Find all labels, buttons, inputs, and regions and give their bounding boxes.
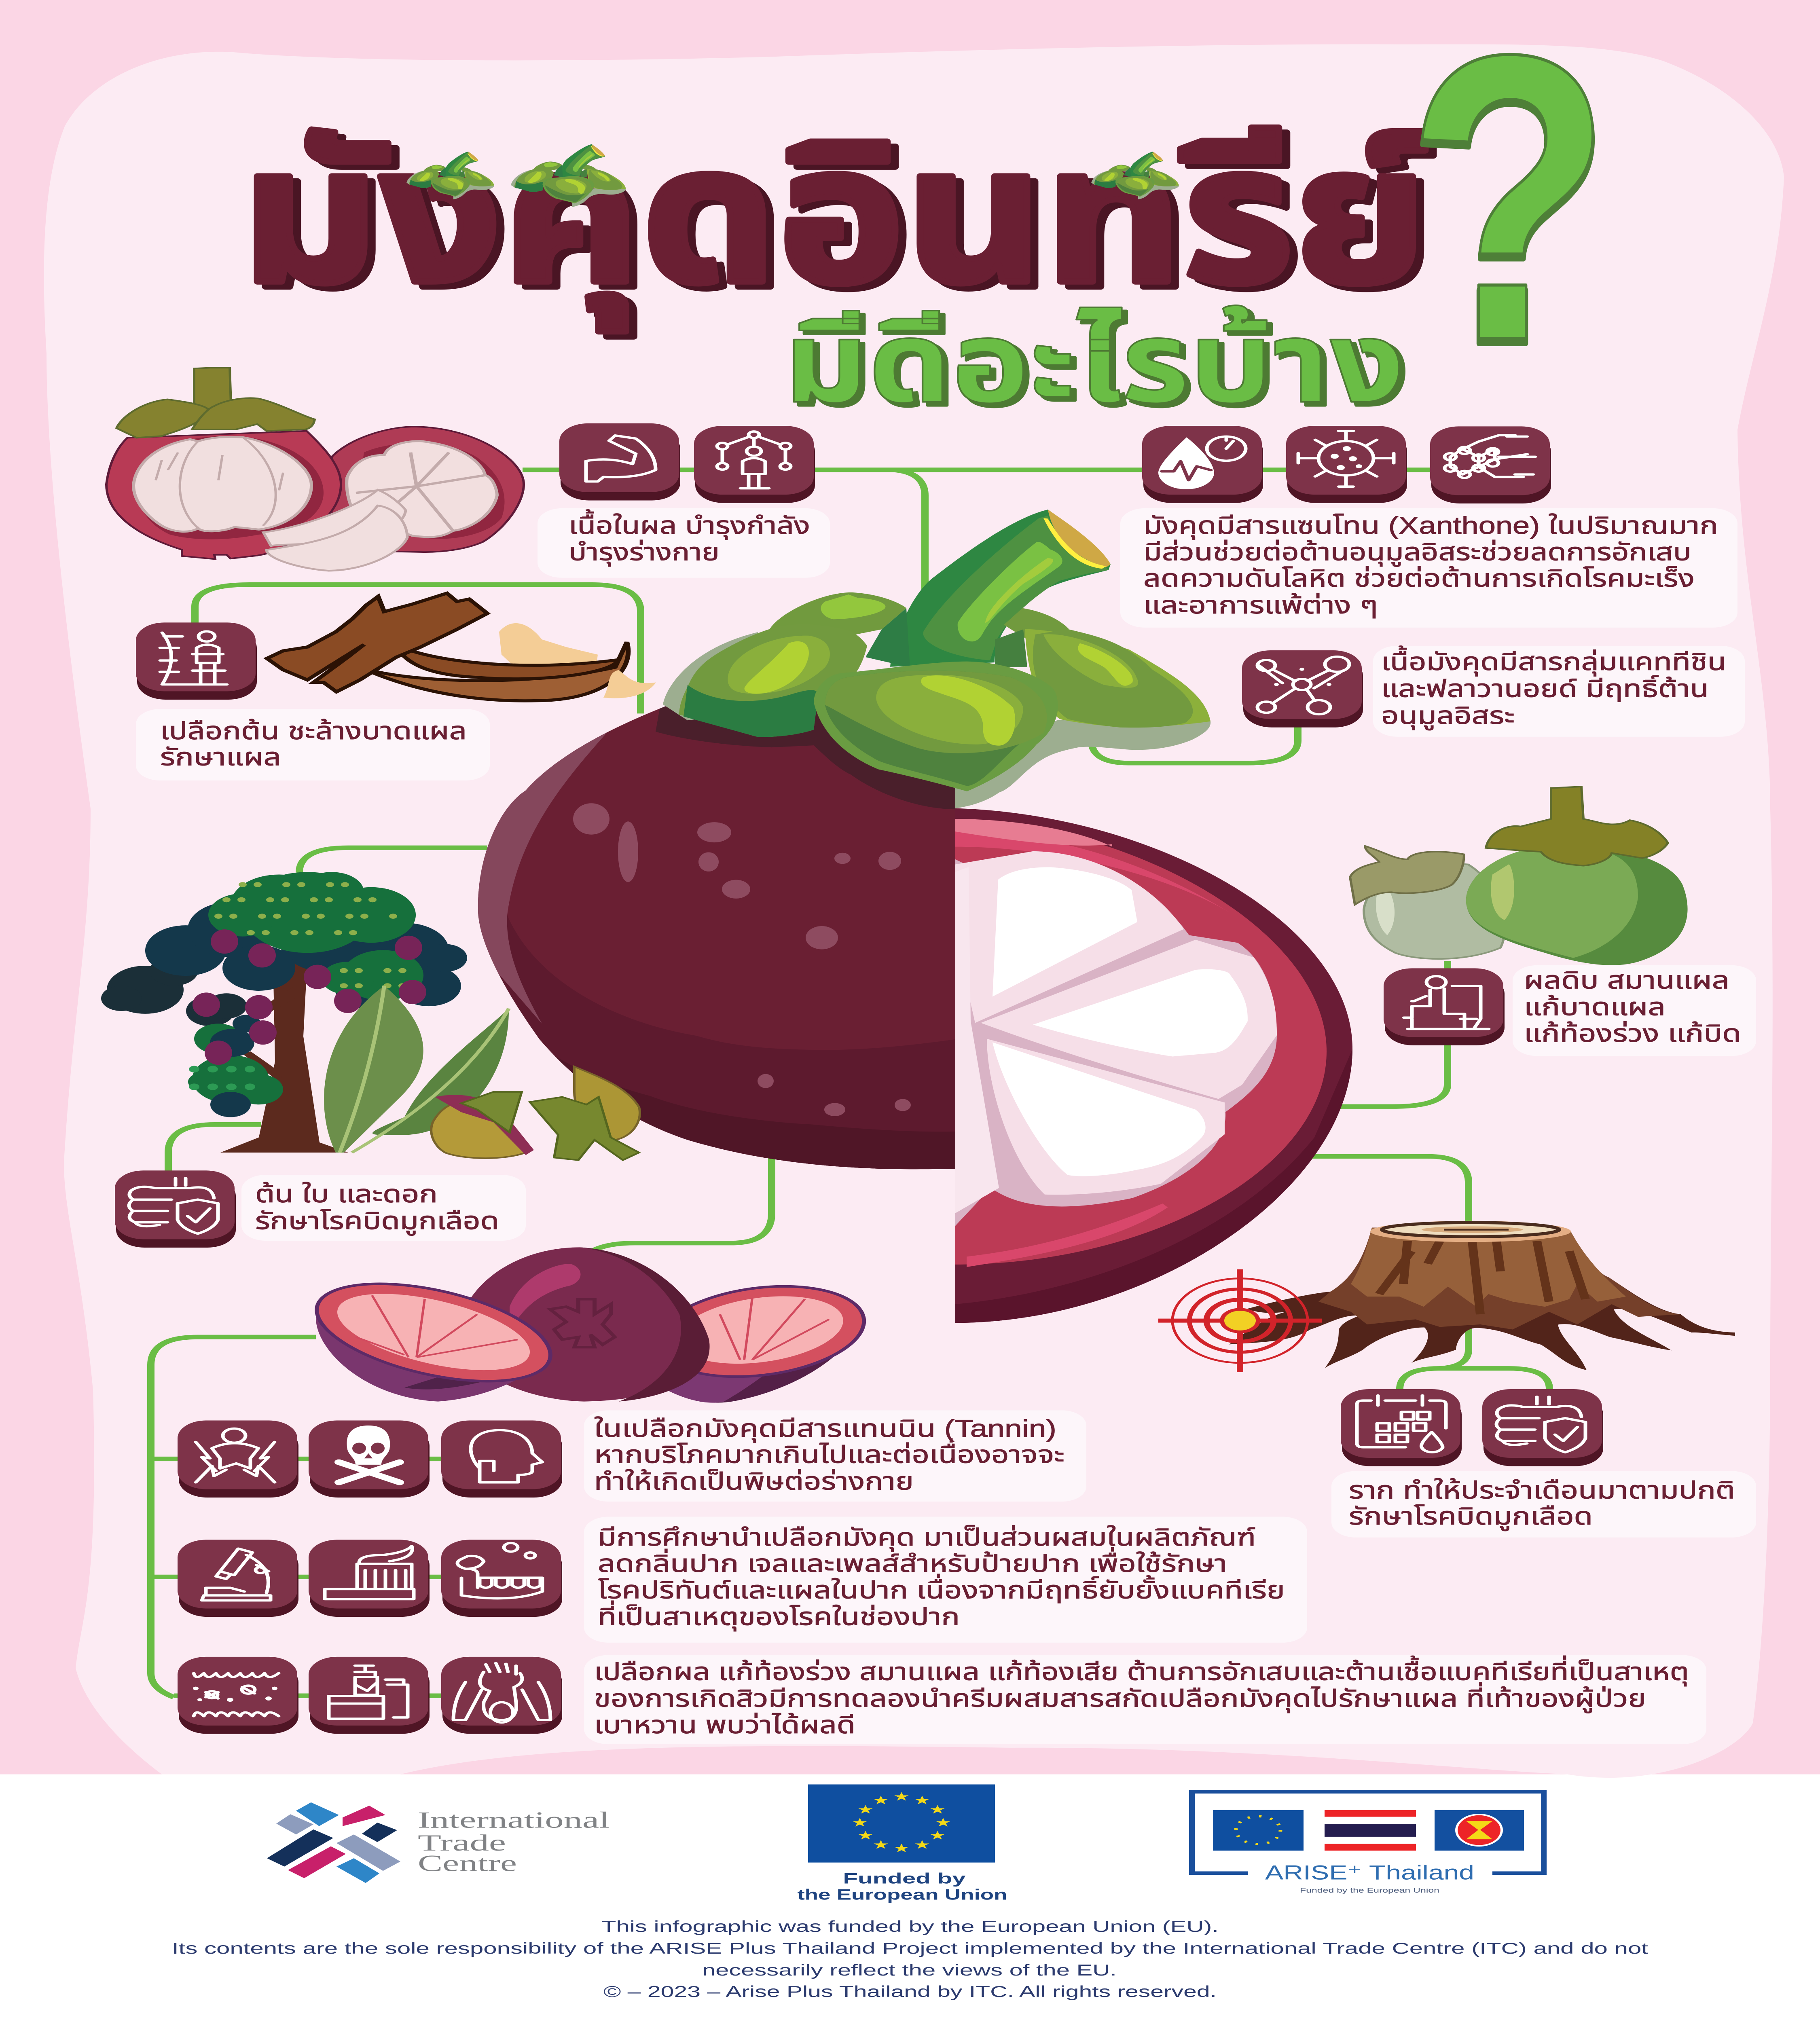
footer disclaimer: necessarily reflect the views of the EU. [702,1961,1117,1979]
text: oral research [598,1524,1285,1631]
icon: green sepals on title (2) [511,144,626,207]
text: catechin: อนุมูลอิสระ [1381,702,1515,730]
footer disclaimer: © – 2023 – Arise Plus Thailand by ITC. All rights reserved. [603,1983,1217,2000]
illustration: bark pieces [267,593,656,701]
small fruits [431,1102,526,1158]
illustration: tree stump with roots [1229,1221,1735,1370]
text: tannin: หากบริโภคมากเกินไปและต่อเนื่องอาจจะ [594,1438,1064,1468]
text: xanthone: และอาการแพ้ต่าง ๆ [1143,592,1378,619]
logo: EU flag: ★ [914,1795,930,1806]
subtitle: มีดีอะไรบ้าง: มีดีอะไรบ้าง [783,299,1405,426]
text: bark [160,717,467,770]
foliage speckle [194,885,421,1087]
stem [194,368,231,409]
text: flesh benefit: เนื้อในผล บำรุงกำลัง [569,509,810,540]
text: roots [1349,1477,1735,1531]
illustration: unripe green mangosteens [1350,787,1688,965]
logo: EU flag: ★ [873,1795,889,1806]
icon: person network [694,426,815,503]
logo: EU flag: ★ [894,1843,909,1854]
text: trunk leaves flowers: รักษาโรคบิดมูกเลือด [255,1207,499,1235]
text: fruit peel [594,1656,1689,1739]
icon: muscle arm [559,423,680,501]
text: bark: รักษาแผล [160,744,281,770]
icon: red target [1158,1269,1322,1372]
icon: toothbrush [309,1540,430,1617]
logo: International Trade Centre: International [418,1807,609,1833]
left half fruit [106,431,341,559]
flag: EU [1213,1810,1304,1851]
text: catechin: เนื้อมังคุดมีสารกลุ่มแคททีชิน [1381,645,1726,677]
text: xanthone [1143,512,1718,619]
footer disclaimer [172,1918,1648,2000]
text: trunk leaves flowers: ต้น ใบ และดอก [255,1180,438,1208]
icon: poisoned person [178,1420,298,1497]
sepals [116,398,315,438]
text: flesh benefit: บำรุงร่างกาย [569,539,720,567]
logo: EU flag: ★ [858,1830,873,1841]
right half fruit [639,1272,881,1403]
text: funded by the European Union [798,1870,1007,1903]
icon: skin bacteria [178,1657,298,1734]
left half fruit [294,1264,574,1402]
icon: DNA and person [136,622,257,700]
icon: intestine shield [115,1170,236,1248]
text: flesh benefit [569,509,810,567]
text boxes [136,508,1756,1744]
whole centre fruit [459,1247,710,1402]
text: funded by the European Union: the European Union [798,1886,1007,1903]
footer disclaimer: Its contents are the sole responsibility of the ARISE Plus Thailand Project implemented by the International Trade Centre (ITC) and do not [172,1940,1648,1957]
mangosteen main illustration [445,510,1375,1339]
footer disclaimer: This infographic was funded by the European Union (EU). [601,1918,1219,1935]
text: fruit peel: เบาหวาน พบว่าได้ผลดี [594,1711,855,1739]
icon: intestine shield (second) [1482,1389,1603,1466]
leaves [372,1009,509,1135]
icon: cosmetics [309,1657,430,1734]
icon: person on toilet [1384,968,1505,1045]
text: raw fruit [1524,967,1741,1047]
icon: skull and crossbones [309,1420,430,1497]
text: funded by the European Union: Funded by [843,1870,966,1887]
text: trunk leaves flowers [255,1180,499,1235]
right half fruit [328,427,524,552]
text: catechin: และฟลาวานอยด์ มีฤทธิ์ต้าน [1381,675,1709,702]
fruit left half (dark skin) [478,706,955,1170]
icon: calendar with drop [1341,1389,1462,1466]
logo: EU flag: ★ [852,1817,868,1828]
logo: EU flag: ★ [930,1804,945,1815]
flag: ASEAN [1435,1810,1524,1851]
green crown [663,510,1211,808]
logo: EU flag: ★ [935,1817,951,1828]
icon: foot care [441,1657,562,1734]
logo: EU flag: ★ [914,1839,930,1850]
white footer band [0,1775,1820,2022]
text: tannin [594,1415,1064,1495]
text: tannin: ทำให้เกิดเป็นพิษต่อร่างกาย [594,1468,914,1495]
logo: ARISE Plus Thailand: ARISE⁺ Thailand [1265,1861,1474,1884]
flag: Thailand [1325,1810,1416,1851]
text: oral research: มีการศึกษานำเปลือกมังคุด มาเป็นส่วนผสมในผลิตภัณฑ์ [598,1524,1256,1552]
logo: EU flag: ★ [873,1839,889,1850]
illustration: purple mangosteens [294,1247,881,1403]
logo: EU flag [808,1784,995,1863]
logo: International Trade Centre [267,1802,609,1883]
text: bark: เปลือกต้น ชะล้างบาดแผล [160,717,467,745]
icon: green sepals on title (1) [406,152,494,199]
logo: ARISE Plus Thailand: Funded by the European Union [1300,1887,1439,1894]
logo: ARISE Plus Thailand [1192,1792,1544,1894]
text: roots: รักษาโรคบิดมูกเลือด [1349,1503,1593,1531]
text: catechin [1381,645,1726,730]
fruit right half (cross-section) [955,808,1375,1339]
logo: EU flag: ★ [930,1830,945,1841]
illustration: mangosteen halves with sepals [106,368,524,571]
logo: International Trade Centre: Trade [418,1830,506,1856]
logo: EU flag: ★ [858,1804,873,1815]
illustration: mangosteen tree [101,872,640,1160]
peeled segments [263,490,407,571]
text: raw fruit: ผลดิบ สมานแผล [1524,967,1729,994]
icon: head profile [441,1420,562,1497]
logo: EU flag: ★ [894,1791,909,1802]
icon: cross molecule [1242,650,1363,728]
text: raw fruit: แก้บาดแผล [1524,994,1666,1020]
connector lines [151,470,1549,1697]
text: oral research: ลดกลิ่นปาก เจลและเพลส์สำหรับป้ายปาก เพื่อใช้รักษา [598,1547,1227,1577]
text: raw fruit: แก้ท้องร่วง แก้บิด [1524,1020,1741,1047]
fruit flesh segments [955,851,1277,1213]
text: tannin: ในเปลือกมังคุดมีสารแทนนิน (Tannin) [594,1415,1056,1443]
icon: microscope [178,1540,298,1617]
text: oral research: ที่เป็นสาเหตุของโรคในช่องปาก [598,1601,960,1631]
logo: International Trade Centre: Centre [418,1850,517,1876]
text: oral research: โรคปริทันต์และแผลในปาก เนื่องจากมีฤทธิ์ยับยั้งแบคทีเรีย [598,1574,1285,1603]
subtitle: มีดีอะไรบ้าง: มีดีอะไรบ้าง [788,302,1409,429]
icon: molecule [1430,426,1551,503]
icon: green sepals on title (3) [1091,152,1179,199]
icon: teeth [441,1540,562,1617]
icon: blood drop gauge [1142,426,1263,503]
icon: virus [1286,426,1407,503]
logo mark [267,1802,400,1883]
